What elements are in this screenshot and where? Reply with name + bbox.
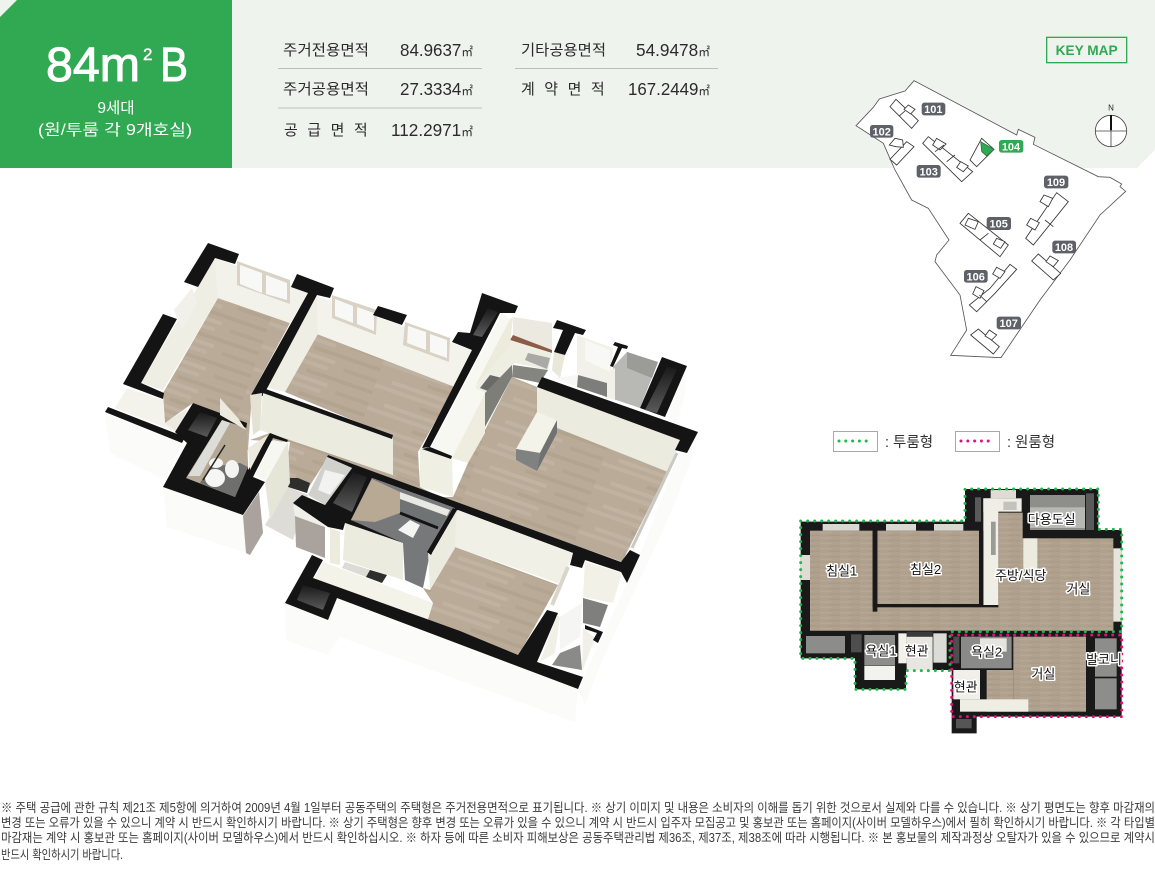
utility room xyxy=(552,320,687,417)
title: unit type: 2 xyxy=(143,45,152,64)
plan: one-room dotted outline xyxy=(952,635,1122,717)
legend: two-room xyxy=(834,432,933,452)
plan: room labels: 욕실2 xyxy=(971,645,1002,660)
key map xyxy=(856,37,1127,358)
panel: type badge xyxy=(0,0,232,168)
building number badges: 106 xyxy=(967,271,985,283)
plan: room labels: 발코니 xyxy=(1086,652,1122,667)
legend: two-room: : 투룸형 xyxy=(885,434,933,451)
exterior faces xyxy=(105,366,697,722)
plan: room labels: 침실2 xyxy=(910,562,941,577)
area table: left column: 84.9637㎡ xyxy=(400,40,473,60)
plan: two-room dotted outline xyxy=(801,489,1122,689)
building number badges xyxy=(870,103,1076,330)
bathroom 1 xyxy=(163,398,288,515)
living room balcony rail xyxy=(632,453,677,548)
living room wall and island xyxy=(516,377,698,472)
entrance xyxy=(243,440,387,583)
footnote xyxy=(1,801,1155,862)
plan: room labels: 주방/식당 xyxy=(995,568,1046,583)
header band xyxy=(0,0,1155,168)
bathroom 2 xyxy=(343,478,457,590)
legend: one-room xyxy=(956,432,1055,452)
footnote: 반드시 확인하시기 바랍니다. xyxy=(1,848,123,862)
building number badges: 101 xyxy=(924,104,942,116)
area table: left column: 공급면적 xyxy=(284,122,377,139)
area table: right column: 167.2449㎡ xyxy=(628,79,710,99)
area table: left column xyxy=(278,40,482,140)
building number badges: 103 xyxy=(920,166,938,178)
compass: N xyxy=(1108,103,1114,112)
key map badge xyxy=(1047,37,1127,63)
bedroom 2 room xyxy=(250,274,472,497)
area table: left column: 112.2971㎡ xyxy=(391,120,473,140)
plan: room labels: 거실 xyxy=(1031,666,1055,681)
plan: room labels xyxy=(826,512,1122,695)
building number badges: 108 xyxy=(1055,242,1073,254)
area table: left column: 주거전용면적 xyxy=(283,42,369,59)
unit count text: (원/투룸 각 9개호실) xyxy=(38,121,192,139)
unit count text xyxy=(38,99,192,139)
area table: left column: 주거공용면적 xyxy=(283,81,369,98)
title: unit type: B xyxy=(160,39,188,92)
plan: room labels: 현관 xyxy=(905,644,929,659)
central wall and shoe cabinet xyxy=(293,455,640,583)
legend: unit type xyxy=(834,432,1055,452)
key map badge: KEY MAP xyxy=(1056,43,1118,58)
buildings xyxy=(889,99,1068,354)
bedroom 1 balcony xyxy=(105,388,188,443)
plan: room labels: 욕실1 xyxy=(865,644,897,659)
site outline xyxy=(856,81,1126,358)
living room floor xyxy=(440,377,668,562)
building number badges: 105 xyxy=(990,218,1008,230)
area table: right column: 54.9478㎡ xyxy=(636,40,710,60)
title: unit type: 84m xyxy=(46,39,140,92)
area table: right column xyxy=(515,40,718,99)
compass xyxy=(1095,103,1127,147)
small unit plan xyxy=(801,489,1122,733)
area table: right column: 계약면적 xyxy=(521,81,614,98)
plan: room labels: 거실 xyxy=(1066,581,1090,596)
building number badges: 104 xyxy=(1002,141,1021,153)
bedroom 3 room xyxy=(285,510,583,689)
plan base walls xyxy=(801,489,1122,733)
title: unit type xyxy=(46,39,188,92)
area table: right column: 기타공용면적 xyxy=(521,42,606,59)
area table: left column: 27.3334㎡ xyxy=(400,79,473,99)
building number badges: 109 xyxy=(1047,177,1065,189)
plan: room labels: 침실1 xyxy=(826,564,857,579)
plan: rooms and fixtures xyxy=(801,490,1122,728)
isometric floor plan xyxy=(105,243,698,722)
unit count text: 9세대 xyxy=(97,99,135,117)
kitchen xyxy=(420,293,552,497)
building number badges: 107 xyxy=(1000,318,1018,330)
building number badges: 102 xyxy=(873,126,891,138)
bedroom 3 balcony xyxy=(540,562,622,672)
plan: room labels: 현관 xyxy=(954,680,978,695)
legend: one-room: : 원룸형 xyxy=(1007,434,1055,451)
plan: room labels: 다용도실 xyxy=(1028,512,1076,527)
bedroom 1 room xyxy=(123,243,309,450)
